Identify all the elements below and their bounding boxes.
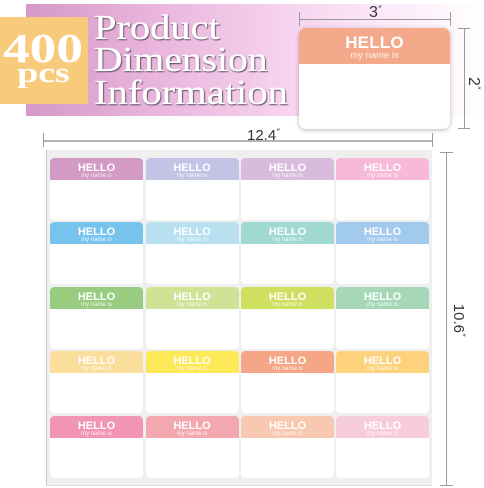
label: rose: my name is: [81, 431, 112, 437]
label: pale green: my name is: [177, 302, 207, 308]
label: green: [50, 287, 143, 349]
label: lilac: HELLO: [269, 162, 306, 174]
sticker sheet: [46, 150, 432, 486]
label: salmon pink: HELLO: [173, 420, 211, 432]
label row 2: [50, 222, 429, 284]
label: coral: HELLO: [269, 355, 306, 367]
label: teal: HELLO: [269, 226, 306, 238]
label: cornflower: [336, 222, 429, 284]
label: lilac: my name is: [272, 173, 303, 179]
label: sage: [336, 287, 429, 349]
label: peach: HELLO: [269, 420, 306, 432]
label: pale yellow: my name is: [81, 366, 112, 372]
dimension text: 10.6 ″: [450, 304, 467, 336]
label: pale green: HELLO: [173, 291, 211, 303]
label: cornflower: my name is: [367, 237, 398, 243]
label: yellow: [146, 351, 238, 413]
badge number: 400: [3, 25, 83, 71]
label: periwinkle: my name is: [177, 173, 207, 179]
large sample label: [299, 28, 450, 129]
label: amber: HELLO: [364, 355, 401, 367]
label: mauve: my name is: [81, 173, 112, 179]
label: green: my name is: [81, 302, 112, 308]
label header: [299, 28, 450, 64]
banner background: [26, 4, 484, 116]
badge: 400 pcs: [0, 17, 88, 104]
label: pale yellow: [50, 351, 143, 413]
label: yellow: my name is: [177, 366, 207, 372]
label: yellow: HELLO: [173, 355, 211, 367]
label: peach: [241, 416, 334, 478]
label: blush: HELLO: [364, 420, 401, 432]
label: lime: HELLO: [269, 291, 306, 303]
label: periwinkle: HELLO: [173, 162, 211, 174]
label: pale blue: my name is: [177, 237, 207, 243]
label row 5: [50, 416, 429, 478]
label row 1: [50, 158, 429, 220]
label: sage: HELLO: [364, 291, 401, 303]
label: teal: [241, 222, 334, 284]
label: pink: [336, 158, 429, 220]
badge unit: pcs: [17, 57, 70, 89]
label: lilac: [241, 158, 334, 220]
label: mauve: [50, 158, 143, 220]
label: amber: my name is: [367, 366, 398, 372]
label: teal: my name is: [272, 237, 303, 243]
label: lime: my name is: [272, 302, 303, 308]
label: blush: [336, 416, 429, 478]
label: lime: [241, 287, 334, 349]
label: sage: my name is: [367, 302, 398, 308]
label: pale blue: HELLO: [173, 226, 211, 238]
dimension text: 3″: [369, 4, 381, 21]
label: rose: HELLO: [78, 420, 115, 432]
title: dimension: Dimension: [94, 40, 268, 79]
label: coral: [241, 351, 334, 413]
label: peach: my name is: [272, 431, 303, 437]
title: information: Information: [94, 73, 288, 112]
my name is text: my name is: [350, 50, 399, 61]
dimension text: 2 ″: [465, 77, 482, 89]
dimension text: 12.4″: [247, 127, 279, 144]
hello text: HELLO: [345, 33, 404, 52]
label: periwinkle: [146, 158, 238, 220]
label: rose: [50, 416, 143, 478]
label row 3: [50, 287, 429, 349]
label: pink: my name is: [367, 173, 398, 179]
label: green: HELLO: [78, 291, 115, 303]
label: blush: my name is: [367, 431, 398, 437]
label: cornflower: HELLO: [364, 226, 401, 238]
label: pale yellow: HELLO: [78, 355, 115, 367]
label: salmon pink: [146, 416, 238, 478]
label: sky blue: HELLO: [78, 226, 115, 238]
label: pale green: [146, 287, 238, 349]
label: mauve: HELLO: [78, 162, 115, 174]
label: pale blue: [146, 222, 238, 284]
label: pink: HELLO: [364, 162, 401, 174]
label: salmon pink: my name is: [177, 431, 207, 437]
label row 4: [50, 351, 429, 413]
title: product: Product: [94, 8, 220, 47]
label: coral: my name is: [272, 366, 303, 372]
label: sky blue: my name is: [81, 237, 112, 243]
label: amber: [336, 351, 429, 413]
label: sky blue: [50, 222, 143, 284]
